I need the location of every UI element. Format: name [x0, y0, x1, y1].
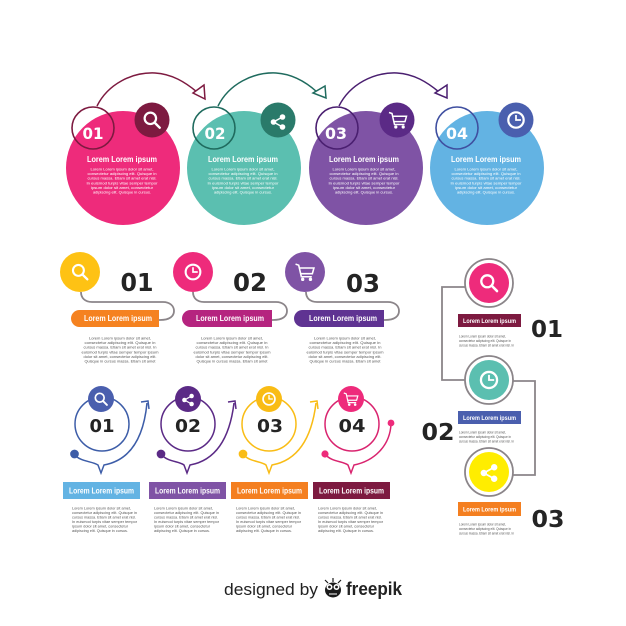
number 02: 02: [175, 416, 201, 437]
text 03: adipiscing elit. Quisque in cursus.: [236, 528, 292, 533]
text 03: consectetur adipiscing elit. Quisque in: [310, 340, 380, 345]
text 04: consectetur adipiscing elit. Quisque in: [452, 171, 520, 176]
step 03 circle: [309, 102, 423, 225]
text 03: ipsum dolor sit amet, consectetur: [333, 185, 396, 190]
icon: search node: [465, 259, 513, 307]
ring 04: [436, 107, 478, 149]
text 01: cursus massa. Etiam sit amet erat nisl. In: [84, 345, 156, 350]
heading 01: Lorem Lorem ipsum: [87, 155, 157, 164]
step 02 circle: [187, 102, 301, 225]
text 01: cursus massa. Etiam sit amet erat nisl.: [88, 176, 156, 181]
text 03: In euismod turpis vitae semper tempor: [236, 519, 302, 524]
text 03: cursus massa. Etiam sit amet erat nisl. In: [459, 530, 514, 536]
label 02: Lorem Lorem ipsum: [155, 486, 220, 496]
text 03: ipsum dolor sit amet, consectetur: [236, 524, 293, 528]
label 03: Lorem Lorem ipsum: [237, 486, 302, 496]
arrow: 02 to 03: [218, 73, 326, 106]
ring and curve 04: [321, 397, 394, 473]
text 02: adipiscing elit. Quisque in cursus.: [214, 190, 272, 194]
text 03: dolor sit amet, consectetur adipiscing elit.: [308, 354, 382, 359]
label pill 02: Lorem Lorem ipsum: [196, 314, 264, 323]
text 02: euismod turpis vitae semper tempor ipsum: [194, 349, 271, 354]
step 03: [231, 386, 318, 533]
text 03: Lorem Lorem ipsum dolor sit amet,: [332, 166, 396, 172]
text 01: Lorem Lorem ipsum dolor sit amet,: [459, 334, 506, 338]
label 03: Lorem Lorem ipsum: [463, 506, 516, 514]
text 04: ipsum dolor sit amet, consectetur: [318, 524, 375, 528]
connector 01: [81, 292, 174, 320]
label 01: [63, 482, 140, 499]
text 02: [194, 336, 271, 364]
text 02: consectetur adipiscing elit. Quisque in: [459, 434, 511, 439]
number 03: 03: [346, 269, 380, 298]
ring 02: [193, 107, 235, 149]
item 03: [285, 252, 399, 364]
text 02: cursus massa. Etiam sit amet erat nisl.: [208, 176, 278, 181]
text 02: In euismod turpis vitae semper tempor: [154, 519, 220, 524]
icon: search badge: [88, 386, 114, 412]
text 02: Lorem Lorem ipsum dolor sit amet,: [459, 430, 506, 434]
text 04: ipsum dolor sit amet, consectetur: [455, 185, 518, 190]
text 03: cursus massa. Etiam sit amet erat nisl. In: [308, 345, 382, 350]
text 02: cursus massa. Etiam sit amet erat nisl. In: [459, 438, 514, 444]
label 03: [231, 482, 308, 499]
number 02: 02: [233, 268, 267, 297]
panel: lower row circular steps: [63, 386, 394, 533]
text 01: cursus massa. Etiam sit amet erat nisl.: [72, 514, 136, 520]
text 02: [208, 166, 279, 194]
text 01: In euismod turpis vitae semper tempor: [72, 519, 138, 524]
text 04: Lorem Lorem ipsum dolor sit amet,: [454, 166, 518, 172]
text 03: cursus massa. Etiam sit amet erat nisl.: [236, 514, 300, 520]
icon: cart badge: [285, 252, 325, 292]
step 04: [313, 386, 394, 533]
text 01: euismod turpis vitae semper tempor ipsum: [82, 349, 159, 354]
text 04: In euismod turpis vitae semper tempor: [450, 180, 522, 185]
label 01: Lorem Lorem ipsum: [69, 486, 134, 496]
heading 03: Lorem Lorem ipsum: [329, 155, 399, 164]
text 03: [236, 506, 302, 533]
label pill 03: Lorem Lorem ipsum: [309, 314, 377, 323]
icon: clock node: [465, 356, 513, 404]
text 01: adipiscing elit. Quisque in cursus.: [72, 528, 128, 533]
text 01: adipiscing elit. Quisque in cursus.: [93, 190, 151, 194]
text 01: dolor sit amet, consectetur adipiscing elit.: [84, 354, 156, 359]
text 02: Lorem Lorem ipsum dolor sit amet,: [201, 336, 263, 340]
ring and arrow 02: [157, 397, 236, 473]
text 03: In euismod turpis vitae semper tempor: [328, 180, 400, 185]
text 02: cursus massa. Etiam sit amet erat nisl. In: [196, 345, 268, 350]
text 04: adipiscing elit. Quisque in cursus.: [457, 190, 515, 194]
text 02: In euismod turpis vitae semper tempor: [208, 180, 279, 185]
ring 03: [316, 107, 358, 149]
text 01: consectetur adipiscing elit. Quisque in: [459, 338, 511, 343]
text 01: Lorem Lorem ipsum dolor sit amet,: [89, 336, 151, 340]
text 02: [459, 430, 514, 444]
text 02: ipsum dolor sit amet, consectetur: [212, 185, 275, 190]
step 04 circle: [430, 102, 544, 225]
label 02: Lorem Lorem ipsum: [463, 415, 516, 422]
number 01: 01: [82, 124, 104, 143]
connector 03: [306, 292, 399, 320]
number 03: 03: [325, 124, 347, 143]
icon: clock badge: [256, 386, 282, 412]
text 04: [450, 166, 522, 194]
label 01: [458, 314, 521, 327]
label 01: Lorem Lorem ipsum: [463, 318, 516, 325]
text 01: ipsum dolor sit amet, consectetur: [72, 524, 129, 528]
step 01: [63, 386, 149, 533]
icon: cart badge: [338, 386, 364, 412]
text 02: consectetur adipiscing elit. Quisque in: [196, 340, 268, 345]
label 04: [313, 482, 390, 499]
text 03: [459, 522, 514, 536]
text 01: Lorem Lorem ipsum dolor sit amet,: [90, 166, 154, 172]
text 02: Lorem Lorem ipsum dolor sit amet,: [154, 506, 213, 510]
credit text: designed by: [224, 580, 319, 599]
number 04: 04: [338, 416, 366, 437]
text 01: In euismod turpis vitae semper tempor: [86, 180, 158, 185]
text 02: [154, 506, 220, 533]
icon: share node: [465, 448, 513, 496]
text 03: Lorem Lorem ipsum dolor sit amet,: [314, 336, 376, 340]
text 01: consectetur adipiscing elit. Quisque in: [72, 510, 137, 515]
label 02: [458, 411, 521, 424]
text 02: consectetur adipiscing elit. Quisque in: [208, 171, 278, 176]
arrow: 03 to 04: [339, 73, 447, 106]
number 02: 02: [204, 124, 226, 143]
text 03: consectetur adipiscing elit. Quisque in: [236, 510, 301, 515]
text 01: [82, 336, 159, 364]
text 01: [72, 506, 138, 533]
icon: search: [134, 102, 170, 138]
connector 02: [193, 292, 287, 320]
text 04: [318, 506, 384, 533]
ring and arrow 03: [239, 397, 318, 473]
text 02: Lorem Lorem ipsum dolor sit amet,: [212, 166, 274, 172]
text 01: [459, 334, 514, 348]
heading 02: Lorem Lorem ipsum: [208, 155, 278, 164]
text 03: [306, 336, 384, 364]
panel: top circles: [66, 73, 544, 225]
text 03: cursus massa. Etiam sit amet erat nisl.: [330, 176, 398, 181]
number 03: 03: [257, 416, 283, 437]
text 03: consectetur adipiscing elit. Quisque in: [330, 171, 398, 176]
text 04: cursus massa. Etiam sit amet erat nisl.: [452, 176, 520, 181]
label pill 01: Lorem Lorem ipsum: [84, 314, 152, 323]
text 03: [328, 166, 400, 194]
icon: cart: [380, 102, 414, 138]
text 02: ipsum dolor sit amet, consectetur: [154, 524, 211, 528]
text 01: [86, 166, 158, 194]
icon: clock badge: [173, 252, 213, 292]
step 02: [149, 386, 236, 533]
connector: circle 1 to circle 2: [442, 287, 465, 380]
connector: circle 2 to circle 3: [513, 381, 535, 475]
heading 04: Lorem Lorem ipsum: [451, 155, 521, 164]
ring and arrow 01: [71, 397, 149, 473]
label 03: [458, 502, 521, 516]
text 04: adipiscing elit. Quisque in cursus.: [318, 528, 374, 533]
icon: search badge: [60, 252, 100, 292]
number 01: 01: [90, 416, 114, 437]
text 03: euismod turpis vitae semper tempor ipsum: [306, 349, 384, 354]
text 02: dolor sit amet, consectetur adipiscing elit.: [196, 354, 268, 359]
text 01: ipsum dolor sit amet, consectetur: [91, 185, 154, 190]
text 03: Lorem Lorem ipsum dolor sit amet,: [459, 522, 506, 526]
text 03: Quisque in cursus massa. Etiam sit amet: [310, 358, 381, 364]
text 02: cursus massa. Etiam sit amet erat nisl.: [154, 514, 218, 520]
icon: clock: [498, 102, 534, 138]
number 03: 03: [532, 507, 564, 533]
number 02: 02: [422, 420, 454, 446]
number 01: 01: [531, 317, 563, 343]
text 04: In euismod turpis vitae semper tempor: [318, 519, 384, 524]
icon: share: [260, 102, 296, 138]
text 01: consectetur adipiscing elit. Quisque in: [84, 340, 156, 345]
number 04: 04: [446, 124, 468, 143]
panel: right vertical flow: [422, 259, 564, 536]
step 01 circle: [66, 102, 180, 225]
footer: designed by freepik: [224, 578, 403, 599]
wordmark: freepik: [346, 579, 403, 599]
text 02: consectetur adipiscing elit. Quisque in: [154, 510, 219, 515]
text 01: Quisque in cursus massa. Etiam sit amet: [84, 358, 156, 364]
text 02: adipiscing elit. Quisque in cursus.: [154, 528, 210, 533]
label 04: Lorem Lorem ipsum: [319, 486, 384, 496]
arrow: 01 to 02: [97, 73, 205, 106]
text 04: cursus massa. Etiam sit amet erat nisl.: [318, 514, 382, 520]
item 01: [60, 252, 174, 364]
text 01: consectetur adipiscing elit. Quisque in: [88, 171, 156, 176]
icon: share badge: [175, 386, 201, 412]
text 03: Lorem Lorem ipsum dolor sit amet,: [236, 506, 295, 510]
ring 01: [72, 107, 114, 149]
text 01: Lorem Lorem ipsum dolor sit amet,: [72, 506, 131, 510]
number 01: 01: [120, 268, 154, 297]
text 03: adipiscing elit. Quisque in cursus.: [335, 190, 393, 194]
icon: freepik mascot: [325, 578, 341, 598]
label 02: [149, 482, 226, 499]
text 02: Quisque in cursus massa. Etiam sit amet: [196, 358, 268, 364]
item 02: [173, 252, 287, 364]
text 01: cursus massa. Etiam sit amet erat nisl. In: [459, 342, 514, 348]
text 03: consectetur adipiscing elit. Quisque in: [459, 526, 511, 531]
panel: middle row timeline: [60, 252, 399, 364]
text 04: Lorem Lorem ipsum dolor sit amet,: [318, 506, 377, 510]
text 04: consectetur adipiscing elit. Quisque in: [318, 510, 383, 515]
